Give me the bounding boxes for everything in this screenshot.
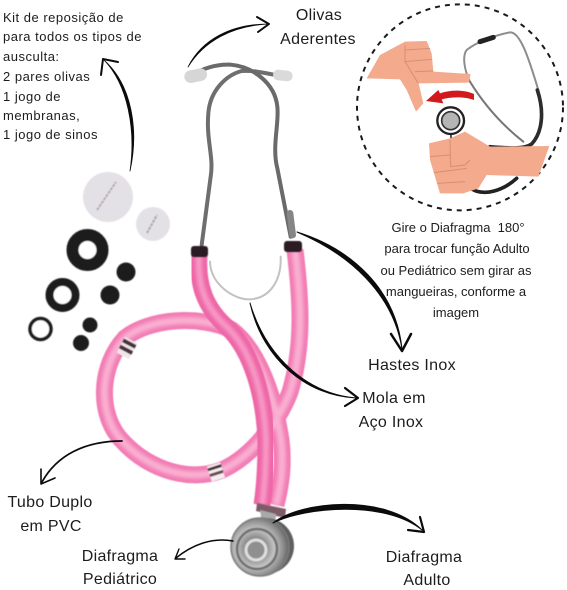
arrow: to tubo duplo (41, 441, 122, 484)
black stem caps (191, 241, 302, 257)
text: gire o diafragma: Gire o Diafragma 180° (391, 220, 525, 235)
text: kit de reposição: 2 pares olivas (3, 69, 90, 84)
label: diafragma pediátrico: Pediátrico (83, 571, 157, 588)
dashed circle (357, 4, 563, 210)
metal clips (117, 337, 225, 482)
icon: lower hand (429, 132, 549, 193)
arrow: to diafragma adulto (273, 504, 424, 532)
text: kit de reposição: 1 jogo de sinos (3, 127, 98, 142)
text: kit de reposição: ausculta: (3, 49, 60, 64)
label: tubo duplo em pvc: Tubo Duplo (7, 494, 93, 511)
text: kit de reposição (3, 10, 142, 142)
label: olivas aderentes: Olivas (296, 7, 342, 24)
label: diafragma adulto: Diafragma (386, 549, 462, 566)
text: kit de reposição: membranas, (3, 108, 80, 123)
text: kit de reposição: para todos os tipos de (3, 29, 142, 44)
label: tubo duplo em pvc (7, 494, 93, 535)
label: olivas aderentes: Aderentes (280, 31, 356, 48)
binaural: metal tubes and olives (190, 65, 293, 299)
arrow: to mola (250, 303, 358, 406)
label: mola em aço inox: Mola em (362, 390, 426, 407)
arrow: to olivas (188, 17, 269, 67)
label: mola em aço inox (359, 390, 426, 431)
text: gire o diafragma: mangueiras, conforme a (386, 284, 527, 299)
chest piece (231, 503, 294, 576)
text: kit de reposição: Kit de reposição de (3, 10, 124, 25)
text: gire o diafragma: imagem (433, 305, 479, 320)
arrow: to hastes inox (297, 232, 411, 351)
arrow: to diafragma pediátrico (175, 540, 233, 559)
arrow: to kit text (101, 59, 134, 171)
label: diafragma adulto (386, 549, 462, 589)
text: kit de reposição: 1 jogo de (3, 89, 61, 104)
text: gire o diafragma: para trocar função Adulto (384, 241, 530, 256)
spring (210, 257, 281, 299)
label: mola em aço inox: Aço Inox (359, 414, 423, 431)
label: diafragma pediátrico: Diafragma (82, 548, 158, 565)
label: hastes inox: Hastes Inox (368, 357, 456, 374)
icon: red arrow (426, 90, 474, 103)
pink rubber tubes (104, 250, 300, 505)
icon: membranes and rings (30, 172, 170, 351)
icon: upper hand (367, 41, 471, 112)
label: olivas aderentes (280, 7, 356, 48)
tube: left stem (199, 255, 266, 505)
panel: giro do diafragma (357, 4, 563, 210)
label: diafragma adulto: Adulto (403, 572, 451, 589)
label: tubo duplo em pvc: em PVC (20, 518, 82, 535)
text: gire o diafragma: ou Pediátrico sem girar as (380, 263, 532, 278)
text: gire o diafragma (380, 220, 532, 320)
icon: small stethoscope (437, 32, 542, 192)
tube: loop (104, 250, 300, 505)
label: diafragma pediátrico (82, 548, 158, 588)
